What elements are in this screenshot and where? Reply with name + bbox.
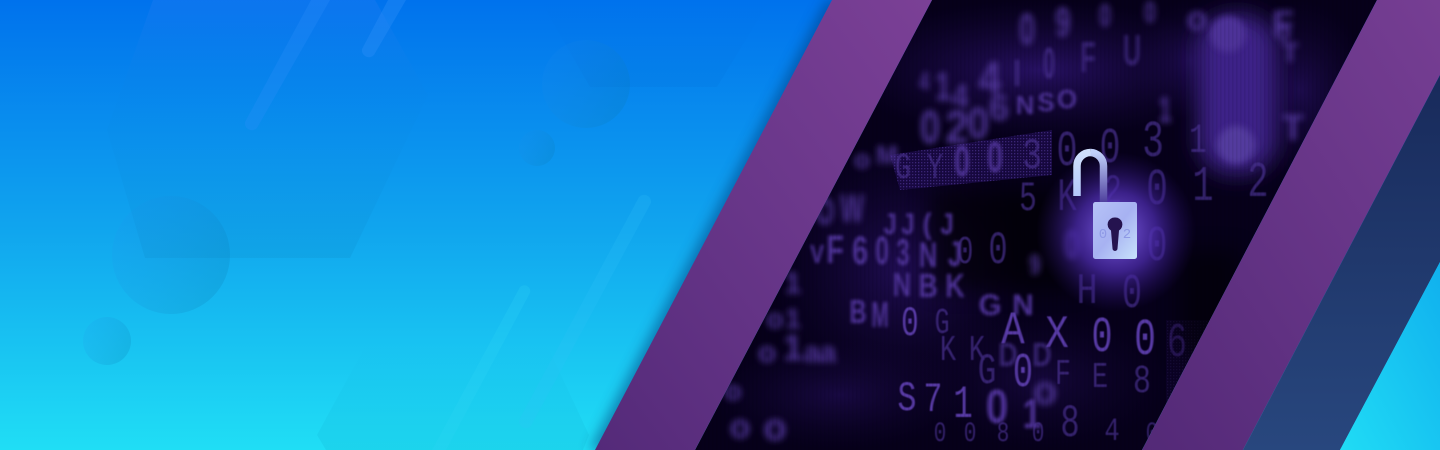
padlock glow [1040,156,1192,308]
heavily blurred characters: o [724,375,742,406]
heavily blurred characters: o [854,144,870,174]
bright sharp characters [898,306,1154,418]
panel: navy band [1243,75,1440,450]
heavily blurred characters: T [1282,107,1304,148]
medium blurred characters: V [810,240,824,269]
medium blurred characters: J [883,206,897,241]
heavily blurred characters: 4 [978,53,1002,105]
medium blurred characters: 0 [954,137,970,185]
medium blurred characters: K [945,269,965,305]
medium blurred characters: N [919,235,937,275]
medium blurred characters: N [1012,289,1034,322]
heavily blurred characters: 1 [785,303,801,334]
padlock shackle: right arm [1090,152,1104,204]
heavily blurred characters: 9 [1055,1,1071,45]
heavily blurred characters: 0 [920,101,940,153]
heavily blurred characters: 2 [945,102,969,154]
dim sharp characters: 3 [1142,114,1164,172]
blurred pill highlight [1198,14,1276,174]
medium blurred characters: N [1016,90,1034,120]
medium blurred characters: F [1080,34,1096,82]
heavily blurred characters: 0 [1019,5,1035,53]
medium blurred characters: D [1032,338,1052,374]
heavily blurred characters: 0 [1064,223,1080,267]
heavily blurred characters: M [876,140,898,170]
medium blurred characters: 0 [1043,40,1055,88]
stripe: lower long [519,195,651,428]
panel: left purple band [595,0,932,450]
bright sharp characters: 0 [1134,312,1156,370]
dim sharp characters: K [969,331,986,371]
heavily blurred characters: a [804,336,821,369]
heavily blurred characters: 4 [951,78,969,115]
heavily blurred characters: O [816,191,834,232]
circle: small centre [536,137,555,166]
stripe: top long [245,0,330,130]
dim sharp characters: 1 [1193,158,1213,215]
medium blurred characters: 3 [896,232,910,273]
heavily blurred characters: o [766,303,784,334]
heavily blurred characters: o [1033,369,1057,413]
bright sharp characters: 7 [924,377,942,425]
medium blurred characters: 6 [852,230,868,273]
medium blurred characters: ( [923,208,932,241]
heavily blurred characters: 6 [989,87,1009,128]
medium blurred characters: J [948,234,962,274]
medium blurred characters: 1 [1023,392,1041,438]
dim sharp characters: 3 [1022,132,1042,182]
dotted code strip [890,130,1052,190]
bright sharp characters: 0 [1013,348,1033,401]
dim sharp characters: 0 [934,418,946,450]
dim sharp characters: 0 [964,418,976,450]
dim sharp characters [895,114,1268,450]
padlock shackle: left arm and arc [1077,152,1090,196]
dim sharp characters: K [940,331,957,371]
keyhole [1108,217,1122,251]
circle: top centre [584,60,630,128]
padlock body [1093,202,1137,259]
heavily blurred characters: T [1281,37,1299,68]
panel: dark code photo [695,0,1377,450]
heavily blurred characters: 1 [935,65,951,109]
dim sharp characters: 8 [997,418,1009,450]
medium blurred characters [810,27,1141,438]
fine vertical scan texture [816,16,1296,428]
heavily blurred characters [724,0,1304,449]
medium blurred characters: D [998,338,1018,374]
bright sharp characters: 1 [953,379,973,431]
icon: open padlock [1077,152,1137,259]
medium blurred characters: U [1123,27,1141,75]
dim sharp characters: 0 [1146,418,1158,450]
heavily blurred characters: 4 [919,67,929,96]
panel: cyan corner [1340,262,1440,450]
bright sharp characters: A [1001,304,1025,357]
dim sharp characters: 1 [1189,117,1207,165]
medium blurred characters: B [849,294,867,331]
dim sharp characters: 2 [1104,168,1122,216]
dim sharp characters: E [1092,358,1108,398]
heavily blurred characters: o [758,336,776,369]
dim sharp characters: 0 [1146,162,1168,220]
medium blurred characters: N [893,267,911,304]
heavily blurred characters: 9 [1030,250,1040,281]
dark band right of padlock [1180,250,1240,360]
dim sharp characters: K [1057,172,1077,224]
heavily blurred characters: 1 [783,327,803,368]
medium blurred characters: 0 [986,381,1008,434]
hexagon: top right [540,0,770,87]
medium blurred characters: B [918,269,938,305]
heavily blurred characters: W [840,187,864,232]
dim sharp characters: 8 [1060,398,1080,450]
dim sharp characters: G [895,149,911,189]
dim sharp characters: 0 [1122,269,1142,322]
heavily blurred characters: 1 [785,267,801,300]
medium blurred characters: 0 [875,229,889,274]
purple haze [710,0,1370,450]
heavily blurred characters: a [820,336,837,369]
dim sharp characters: 0 [1100,120,1120,177]
shadow of left purple band [589,0,926,450]
dim sharp characters: Y [927,149,943,189]
dim sharp characters: 0 [1147,218,1167,275]
medium blurred characters: F [826,229,844,272]
heavily blurred characters: F [1272,3,1294,44]
heavily blurred characters: o [763,407,787,449]
circle: small left [83,317,131,365]
panel base [695,0,1377,450]
dim sharp characters: 0 [1032,418,1044,450]
dim sharp characters: 0 [957,231,973,276]
dim sharp characters: F [1055,355,1071,395]
dim sharp characters: 2 [1248,154,1268,211]
dim sharp characters: 0 [1057,123,1077,180]
panel: right purple band [1142,0,1440,450]
circle: large left [138,225,230,314]
dim sharp characters: H [1076,267,1098,316]
dim sharp characters: G [978,347,996,397]
dim sharp characters: 0 [988,225,1008,277]
medium blurred characters: O [1057,84,1077,114]
dim sharp characters: G [934,304,950,345]
dark band under the code row [930,190,1080,290]
icon: open padlock: 2 [1123,227,1131,243]
dim sharp characters: 6 [1167,318,1187,371]
dim sharp characters: 8 [1133,359,1151,404]
bright sharp characters: S [898,376,916,424]
medium blurred characters: 0 [987,133,1003,181]
hexagon: bottom [318,434,588,450]
hexagon: upper centre [146,0,382,258]
bright sharp characters: X [1045,308,1069,361]
dim sharp characters: 4 [1104,413,1120,450]
medium blurred characters: J [901,206,915,241]
bright sharp characters: 0 [901,300,919,348]
stripe: top short [362,0,406,57]
medium blurred characters: G [978,289,1002,322]
bright sharp characters: 0 [1092,309,1112,366]
medium blurred characters: M [871,295,889,336]
medium blurred characters: I [1013,51,1021,94]
digits on padlock: 0 [1099,227,1107,243]
heavily blurred characters: o [1275,16,1291,46]
heavily blurred characters: o [730,408,750,446]
stripe: lower short [432,285,530,450]
heavily blurred characters: o [1187,0,1207,38]
dim sharp characters: 5 [1019,175,1037,223]
heavily blurred characters: 1 [1158,90,1172,130]
decorative geometric shapes [86,0,630,450]
medium blurred characters: S [1037,87,1055,117]
heavily blurred characters: 0 [967,98,989,147]
medium blurred characters: J [940,206,954,241]
